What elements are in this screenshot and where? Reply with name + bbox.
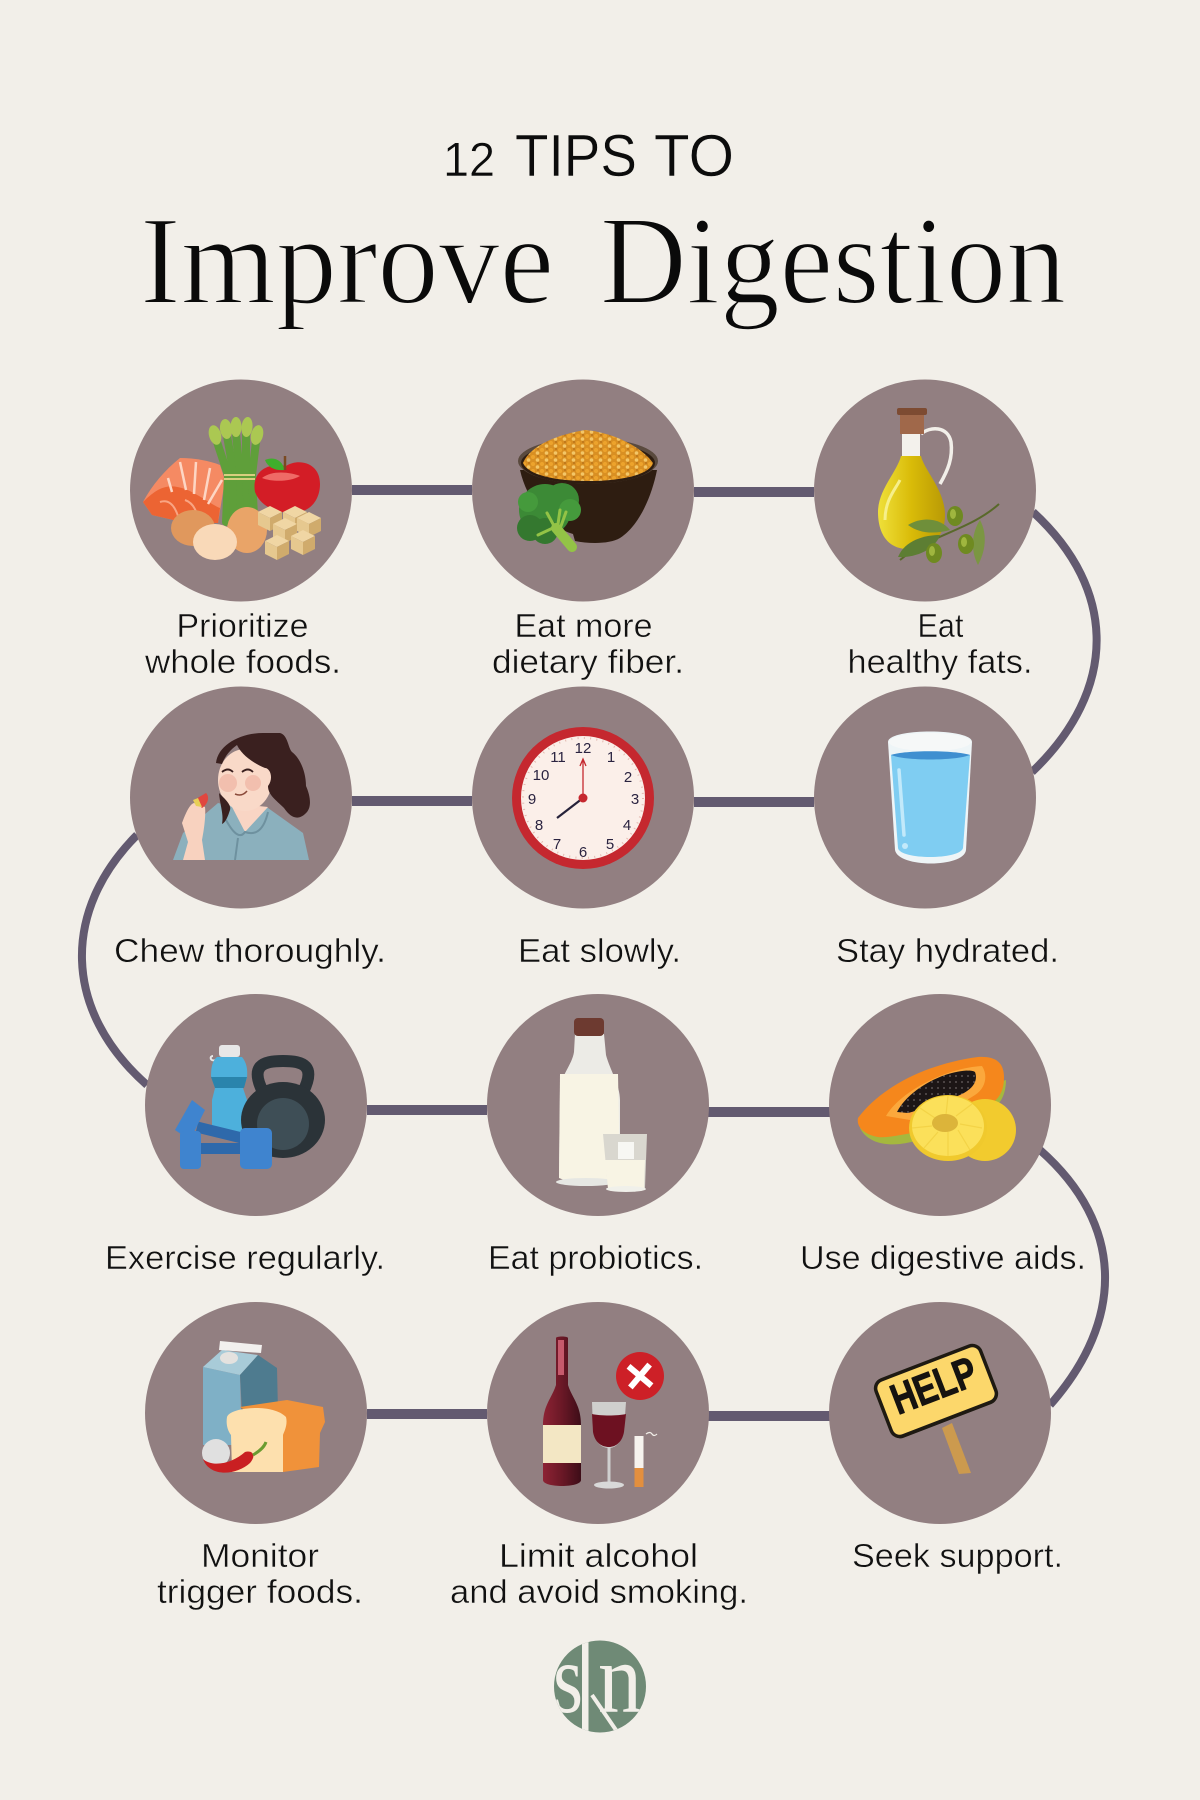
icon: loaf of bread bbox=[202, 1400, 325, 1472]
connector path linking the twelve tips bbox=[82, 490, 1105, 1416]
icon: wall clock bbox=[512, 727, 654, 869]
label: healthy fats. bbox=[848, 643, 1032, 680]
icon: wall clock: 5 bbox=[606, 836, 614, 853]
icon: wall clock: 8 bbox=[535, 817, 543, 834]
label: Eat probiotics. bbox=[488, 1239, 703, 1276]
label: Monitor bbox=[201, 1537, 319, 1574]
label: Stay hydrated. bbox=[836, 932, 1059, 969]
label bbox=[157, 1537, 363, 1610]
icon: cigarette bbox=[634, 1432, 657, 1487]
label bbox=[492, 607, 684, 680]
label: Chew thoroughly. bbox=[114, 932, 386, 969]
label: Use digestive aids. bbox=[800, 1239, 1086, 1276]
icon: chili pepper bbox=[203, 1442, 266, 1473]
label: Eat more bbox=[514, 607, 652, 644]
icon: kettlebell bbox=[241, 1061, 325, 1158]
title line: 12 tips to: TO bbox=[654, 123, 734, 189]
tip 12: seek support bbox=[829, 1302, 1063, 1574]
label: Eat slowly. bbox=[518, 932, 681, 969]
icon: wall clock: 1 bbox=[607, 749, 615, 766]
tip 8: eat probiotics bbox=[487, 994, 709, 1276]
tip 1: prioritize whole foods bbox=[130, 380, 352, 680]
icon: wall clock: 3 bbox=[631, 791, 639, 808]
logo: skn monogram: n bbox=[598, 1623, 642, 1734]
icon: broccoli bbox=[517, 483, 581, 547]
icon: woman chewing bbox=[173, 733, 310, 860]
icon: salmon bbox=[143, 458, 225, 523]
label: Eat bbox=[918, 607, 964, 644]
title line: 12 tips to bbox=[443, 123, 734, 189]
icon: wall clock: 4 bbox=[623, 817, 631, 834]
label bbox=[144, 607, 341, 680]
icon: wall clock: 12 bbox=[575, 740, 591, 757]
heading: improve digestion: Improve bbox=[140, 192, 554, 331]
icon: wall clock: 11 bbox=[550, 749, 566, 766]
icon: wall clock: 10 bbox=[533, 767, 549, 784]
icon: wine glass bbox=[592, 1402, 626, 1488]
icon: help sign: HELP bbox=[884, 1348, 984, 1424]
icon: milk bottle bbox=[556, 1018, 620, 1186]
icon: water bottle bbox=[211, 1045, 247, 1133]
icon: wine bottle bbox=[543, 1336, 581, 1486]
icon: wall clock: 7 bbox=[553, 836, 561, 853]
icon: glass of water bbox=[888, 732, 972, 864]
logo: skn monogram bbox=[554, 1640, 646, 1732]
icon: olive oil bottle bbox=[878, 408, 951, 549]
label bbox=[848, 607, 1032, 680]
label: Seek support. bbox=[852, 1537, 1063, 1574]
icon: tofu cubes bbox=[258, 506, 321, 560]
icon: help sign bbox=[873, 1343, 1000, 1474]
icon: pineapple rings bbox=[909, 1095, 1016, 1161]
icon: glass of milk bbox=[603, 1134, 647, 1192]
title line: 12 tips to: TIPS bbox=[515, 123, 637, 189]
icon: no symbol bbox=[616, 1352, 664, 1400]
label: trigger foods. bbox=[157, 1573, 363, 1610]
icon: milk carton bbox=[203, 1341, 278, 1445]
icon: papaya bbox=[858, 1057, 1006, 1144]
icon: wall clock: 6 bbox=[579, 844, 587, 861]
icon: apple bbox=[254, 456, 320, 513]
tip 10: monitor trigger foods bbox=[145, 1302, 367, 1610]
heading: improve digestion bbox=[140, 192, 1066, 331]
title line: 12 tips to: 12 bbox=[443, 134, 495, 187]
label: dietary fiber. bbox=[492, 643, 684, 680]
icon: asparagus bbox=[207, 416, 265, 524]
label: and avoid smoking. bbox=[450, 1573, 748, 1610]
tip 9: use digestive aids bbox=[800, 994, 1086, 1276]
label: Limit alcohol bbox=[499, 1537, 698, 1574]
icon: eggs bbox=[171, 507, 267, 560]
label: Prioritize bbox=[176, 607, 308, 644]
tip 11: limit alcohol and avoid smoking bbox=[450, 1302, 748, 1610]
tip 6: stay hydrated bbox=[814, 686, 1059, 969]
tip 3: eat healthy fats bbox=[814, 380, 1036, 680]
icon: olive branch bbox=[898, 504, 999, 565]
tip 4: chew thoroughly bbox=[114, 686, 386, 969]
icon: blue dumbbells bbox=[175, 1100, 272, 1169]
icon: wall clock: 9 bbox=[528, 791, 536, 808]
tip 7: exercise regularly bbox=[105, 994, 385, 1276]
icon: wall clock: 2 bbox=[624, 769, 632, 786]
heading: improve digestion: Digestion bbox=[600, 192, 1066, 331]
label: Exercise regularly. bbox=[105, 1239, 385, 1276]
tip 5: eat slowly bbox=[472, 686, 694, 969]
label bbox=[450, 1537, 748, 1610]
label: whole foods. bbox=[144, 643, 341, 680]
icon: bowl of grains bbox=[518, 430, 658, 543]
logo: skn monogram: s bbox=[553, 1623, 583, 1734]
tip 2: eat more dietary fiber bbox=[472, 380, 694, 680]
